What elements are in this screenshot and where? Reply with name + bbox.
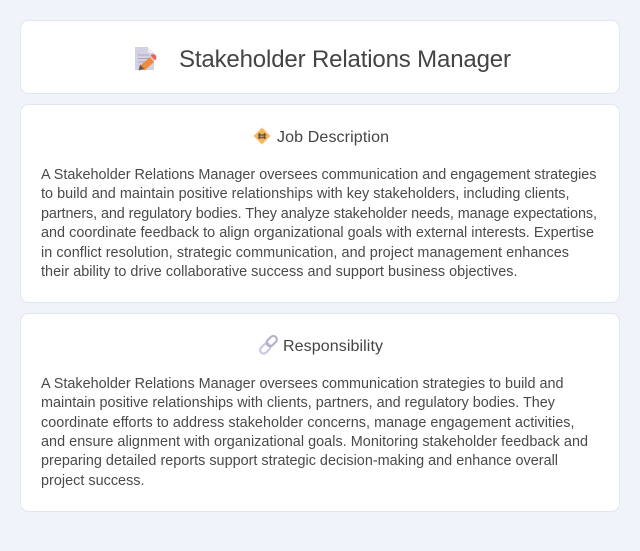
text block: job description: and coordinate feedback to align organizational goals with external interests. Expertise (41, 225, 594, 241)
text block: responsibility: project success. (41, 473, 144, 489)
text block: job description: A Stakeholder Relations Manager oversees communication and engagement strategies (41, 167, 596, 183)
heading: responsibility: Responsibility (283, 338, 383, 355)
icon: orange diamond sign (254, 128, 270, 144)
text block: job description (41, 167, 597, 280)
panel: responsibility (20, 314, 620, 512)
title: Stakeholder Relations Manager (179, 46, 511, 73)
text block: job description: partners, and regulatory bodies. They analyze stakeholder needs, manage expectations, (41, 206, 597, 222)
heading: job description: Job Description (277, 129, 389, 146)
text block: responsibility: and ensure alignment with organizational goals. Monitoring stakeholder feedback and (41, 434, 588, 450)
text block: job description: their ability to drive collaborative success and support business objectives. (41, 264, 518, 280)
text block: job description: in conflict resolution, strategic communication, and project management enhances (41, 245, 569, 261)
text block: responsibility: coordinate efforts to address stakeholder concerns, manage engagement activities, (41, 415, 574, 431)
text block: responsibility (41, 376, 588, 489)
panel: job description (20, 104, 620, 302)
text block: responsibility: maintain positive relationships with clients, partners, and regulatory bodies. They (41, 395, 556, 411)
icon: document with pencil (135, 47, 156, 70)
text block: responsibility: preparing detailed reports support strategic decision-making and enhance overall (41, 453, 558, 469)
icon: chain link (259, 334, 278, 355)
text block: responsibility: A Stakeholder Relations Manager oversees communication strategies to build and (41, 376, 564, 392)
panel: title card (20, 20, 620, 94)
text block: job description: to build and maintain positive relationships with key stakeholders, including clients, (41, 186, 570, 202)
